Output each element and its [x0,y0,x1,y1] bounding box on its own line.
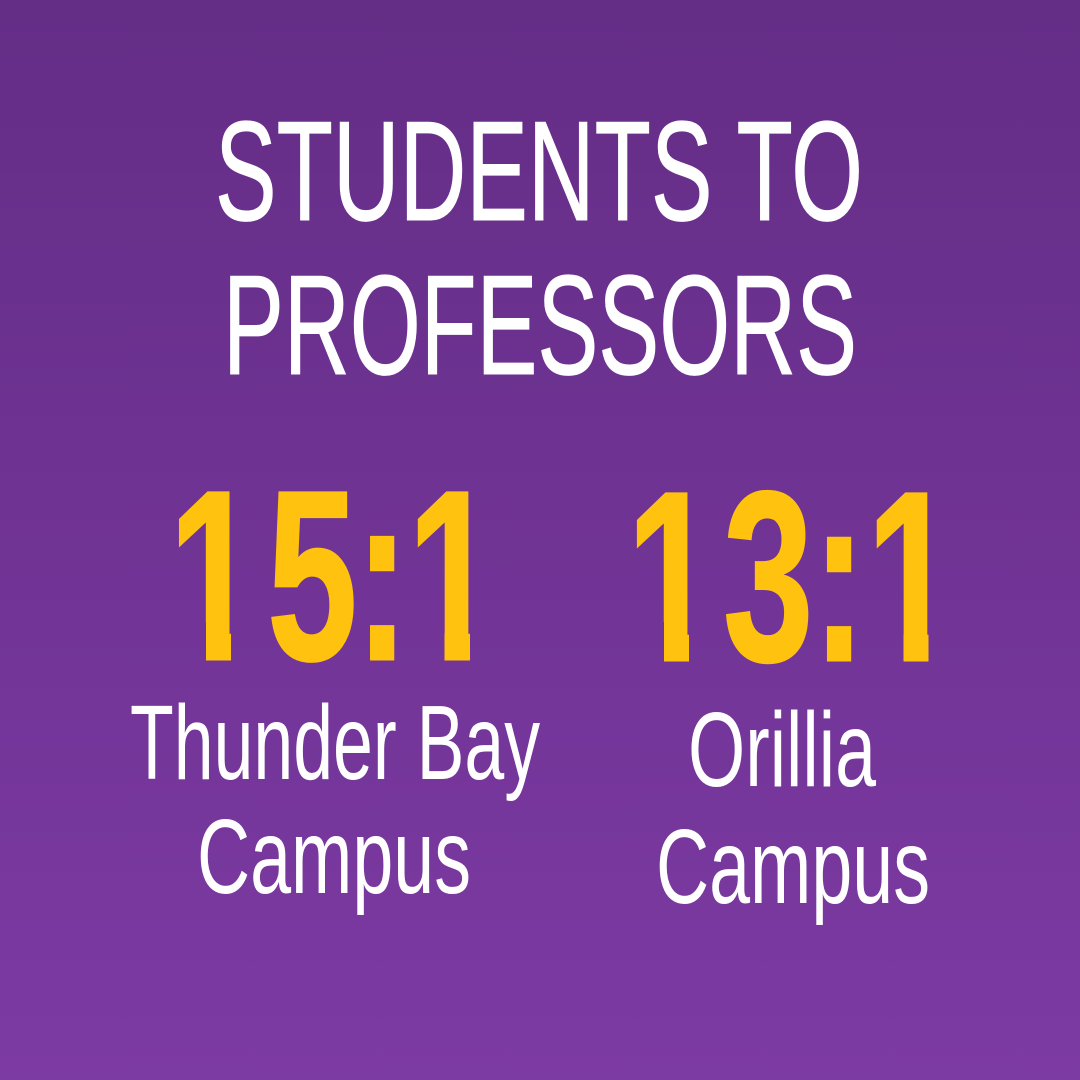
ratio 15:1: 15:1 [169,440,498,711]
label Orillia Campus [656,691,930,926]
label Thunder Bay Campus [130,684,540,916]
label Orillia Campus: Campus [656,808,930,926]
label Thunder Bay Campus: Thunder Bay [130,684,540,802]
ratio 13:1: 13:1 [626,441,957,712]
stat: Thunder Bay Campus [132,491,540,915]
label Orillia Campus: Orillia [688,691,876,809]
label Thunder Bay Campus: Campus [197,798,471,916]
stat: Orillia Campus [636,490,928,925]
title [215,92,863,405]
